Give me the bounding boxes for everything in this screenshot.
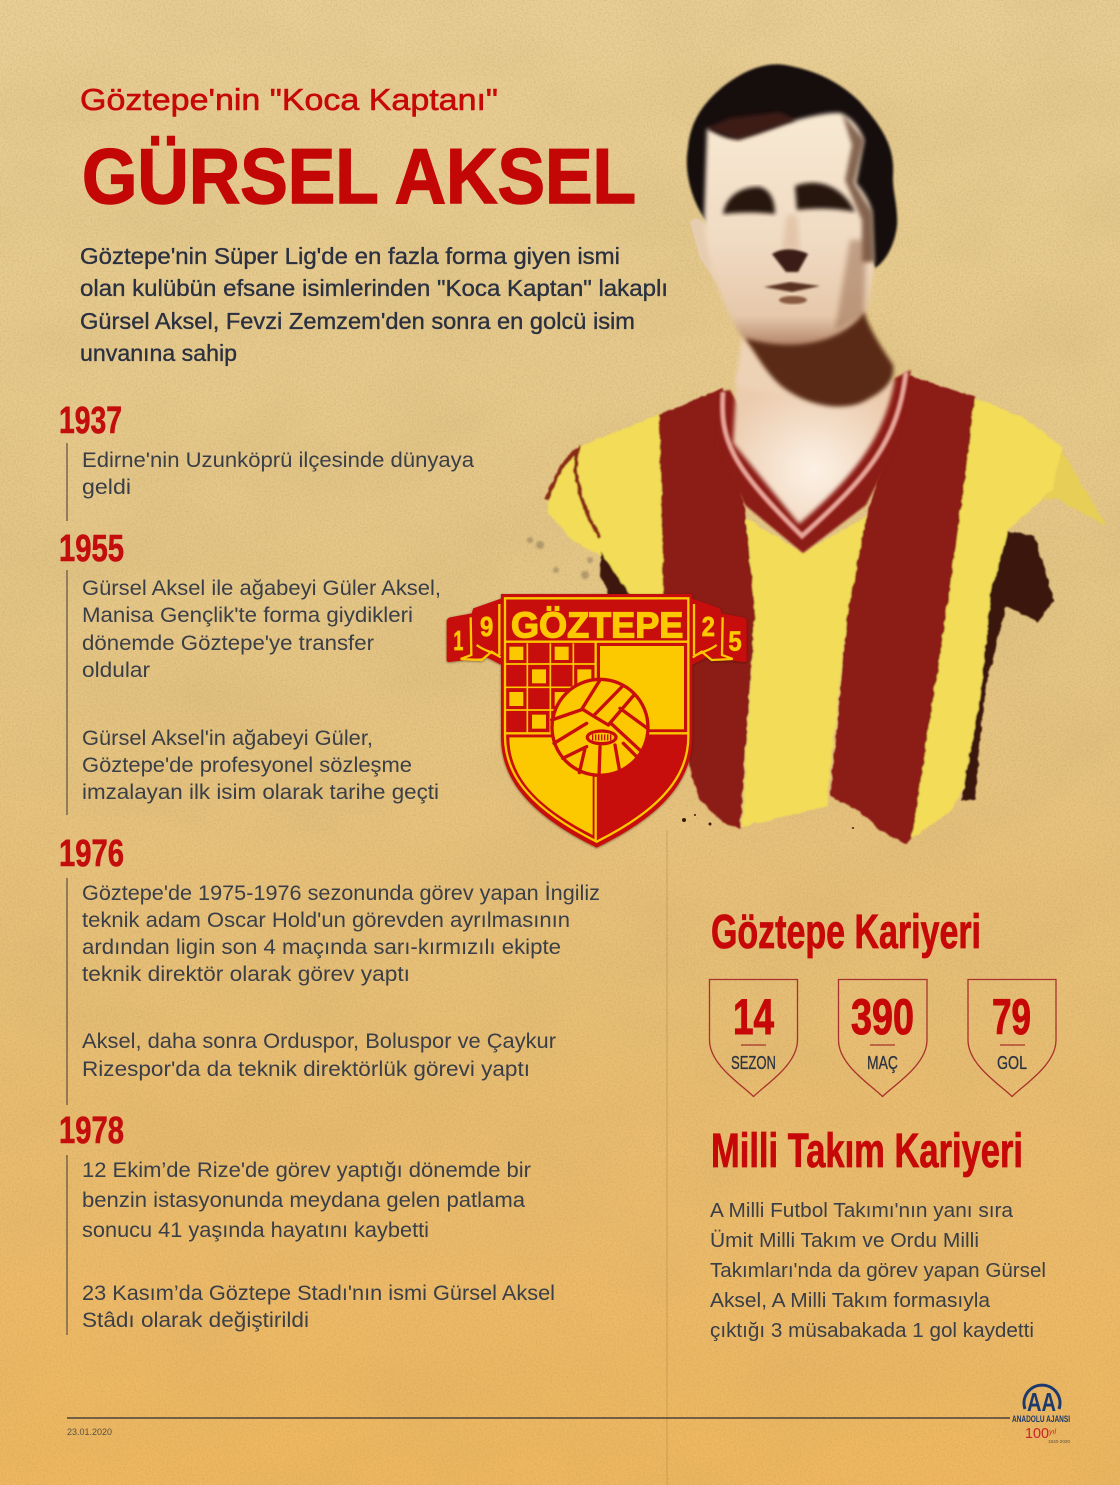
title: GÜRSEL AKSEL [82, 132, 636, 220]
timeline: 1978: 1978 [59, 1110, 124, 1152]
left ribbon [447, 598, 502, 665]
national team paragraph: A Milli Futbol Takımı'nın yanı sıra [710, 1200, 1014, 1222]
intro paragraph [80, 243, 668, 366]
Anadolu Ajansı logo [1012, 1385, 1070, 1444]
stat shield: 390 maç [838, 980, 927, 1096]
timeline: 1976 [59, 833, 600, 1105]
lower lip shade [779, 296, 807, 304]
right yellow panel [905, 396, 1062, 838]
timeline: 1978: Stâdı olarak değiştirildi [82, 1309, 309, 1332]
national team paragraph [710, 1200, 1046, 1342]
stat shield: 390 maç: MAÇ [867, 1053, 898, 1073]
nose [772, 249, 808, 272]
intro paragraph: Gürsel Aksel, Fevzi Zemzem'den sonra en golcü isim [80, 308, 635, 334]
ink splatter [682, 814, 854, 829]
center yellow panel [742, 515, 868, 827]
timeline: 1978: sonucu 41 yaşında hayatını kaybetti [82, 1219, 429, 1242]
stat shield: 14 sezon: 14 [733, 989, 774, 1045]
timeline: 1937: 1937 [59, 400, 122, 442]
timeline: 1978: 23 Kasım’da Göztepe Stadı'nın ismi Gürsel Aksel [82, 1282, 555, 1305]
intro paragraph: Göztepe'nin Süper Lig'de en fazla forma giyen ismi [80, 243, 620, 269]
timeline: 1978: 12 Ekim’de Rize'de görev yaptığı dönemde bir [82, 1159, 531, 1182]
hairline shadow [707, 112, 796, 140]
right ribbon: 5 [728, 626, 742, 657]
timeline: 1978 [59, 1110, 555, 1335]
heading: Göztepe Kariyeri: Göztepe Kariyeri [711, 906, 981, 959]
agency name: ANADOLU AJANSI [1012, 1414, 1070, 1424]
timeline: 1978: benzin istasyonunda meydana gelen patlama [82, 1189, 525, 1212]
national team paragraph: Takımları'nda da görev yapan Gürsel [710, 1260, 1046, 1282]
timeline: 1955: Gürsel Aksel'in ağabeyi Güler, [82, 727, 373, 750]
bottom left quadrant [509, 737, 593, 835]
crest name: GÖZTEPE [511, 604, 683, 645]
timeline: 1955: dönemde Göztepe'ye transfer [82, 632, 374, 655]
stat shield: 79 gol: GOL [997, 1053, 1027, 1073]
timeline: 1937 [59, 400, 474, 521]
dividers [505, 642, 688, 841]
nose bridge shade [782, 215, 800, 250]
logo AA letters: AA [1027, 1387, 1056, 1417]
left red stripe [659, 388, 755, 829]
stat shield: 79 gol: 79 [992, 989, 1031, 1045]
timeline: 1955: imzalayan ilk isim olarak tarihe geçti [82, 781, 439, 804]
national team paragraph: Ümit Milli Takım ve Ordu Milli [710, 1230, 979, 1252]
hair [687, 64, 897, 268]
subtitle: Göztepe'nin "Koca Kaptanı" [80, 82, 498, 117]
timeline: 1955: oldular [82, 659, 150, 682]
right red stripe [830, 375, 975, 844]
collar band [716, 370, 911, 553]
date: 23.01.2020 [67, 1427, 112, 1437]
shield inner outline [505, 598, 688, 842]
timeline: 1937: Edirne'nin Uzunköprü ilçesinde dünyaya [82, 449, 474, 472]
stat shield: 14 sezon [710, 980, 798, 1096]
checker board [506, 643, 596, 733]
player photo [527, 64, 1106, 844]
brow and eye right [795, 183, 855, 212]
timeline: 1976: 1976 [59, 833, 124, 875]
year label: yıl [1048, 1429, 1056, 1436]
stat shield: 14 sezon: SEZON [731, 1053, 776, 1073]
right ribbon [692, 598, 747, 665]
year span: 1920-2020 [1048, 1439, 1070, 1444]
right sleeve tip [1044, 447, 1106, 526]
brush smudges [527, 537, 593, 579]
temple shadow [842, 113, 874, 262]
right ribbon: 2 [702, 611, 715, 642]
timeline: 1955: Göztepe'de profesyonel sözleşme [82, 754, 412, 777]
100th year mark: 100 [1025, 1425, 1049, 1442]
mouth [764, 282, 820, 292]
collar stripe [723, 372, 906, 536]
timeline: 1976: Göztepe'de 1975-1976 sezonunda görev yapan İngiliz [82, 882, 600, 905]
timeline: 1976: teknik direktör olarak görev yaptı [82, 963, 410, 986]
face [704, 113, 874, 352]
football [550, 678, 650, 777]
timeline: 1976: teknik adam Oscar Hold'un görevden ayrılmasının [82, 909, 570, 932]
left sleeve seam [547, 450, 600, 537]
neck light [736, 335, 790, 400]
timeline: 1976: Rizespor'da da teknik direktörlük görevi yaptı [82, 1058, 530, 1081]
timeline: 1976: Aksel, daha sonra Orduspor, Boluspor ve Çaykur [82, 1030, 556, 1053]
intro paragraph: unvanına sahip [80, 340, 237, 366]
ear left [690, 219, 716, 282]
cheek shadow [835, 240, 866, 330]
chest skin [733, 372, 895, 524]
national team paragraph: çıktığı 3 müsabakada 1 gol kaydetti [710, 1320, 1034, 1342]
timeline: 1937: geldi [82, 476, 131, 499]
national team paragraph: Aksel, A Milli Takım formasıyla [710, 1290, 991, 1312]
timeline: 1976: ardından ligin son 4 maçında sarı-kırmızılı ekipte [82, 936, 561, 959]
neck shadow [745, 312, 893, 407]
intro paragraph: olan kulübün efsane isimlerinden "Koca Kaptan" lakaplı [80, 275, 668, 301]
brow and eye left [723, 187, 775, 214]
timeline: 1955 [59, 528, 441, 815]
footer rule [67, 1417, 1010, 1419]
timeline: 1955: Manisa Gençlik'te forma giydikleri [82, 604, 413, 627]
jersey [547, 375, 1106, 844]
stat shield: 390 maç: 390 [851, 989, 914, 1045]
jersey left sleeve and yellow base [547, 413, 670, 700]
left underarm shadow [600, 552, 632, 602]
shield [501, 594, 692, 848]
left ribbon: 9 [480, 611, 493, 642]
top right quadrant [600, 646, 684, 729]
stat shield: 79 gol [968, 980, 1056, 1096]
right arm shadow [962, 530, 1054, 800]
left ribbon: 1 [453, 625, 463, 656]
timeline: 1955: Gürsel Aksel ile ağabeyi Güler Aksel, [82, 577, 441, 600]
timeline: 1955: 1955 [59, 528, 124, 570]
logo arc [1024, 1385, 1060, 1409]
Göztepe club crest [447, 594, 747, 848]
